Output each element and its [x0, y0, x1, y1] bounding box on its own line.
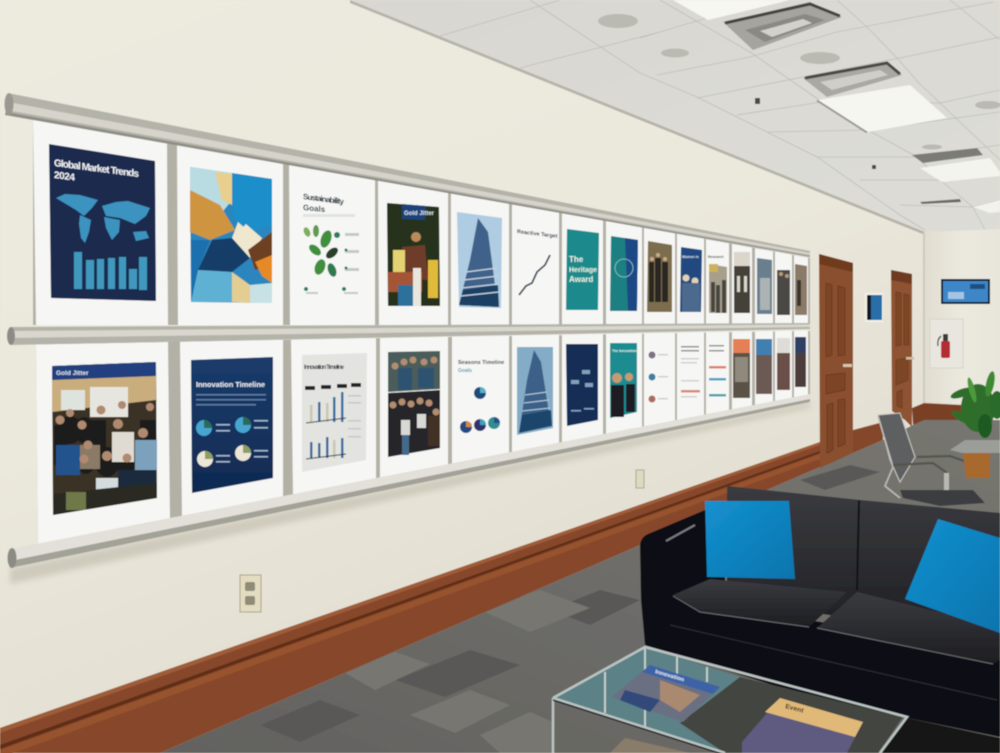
poster: Innovation Timeline navy: [191, 357, 273, 493]
poster: two group photos: [388, 351, 440, 457]
air vent: far: [912, 148, 983, 163]
struts row 1: [33, 116, 810, 325]
side table: [950, 440, 1000, 478]
magazine lower shelf: [610, 738, 690, 753]
magazine left: [612, 665, 720, 722]
air vent: farthest: [920, 199, 961, 204]
poster: navy diagram: [566, 344, 598, 426]
pie charts: [196, 417, 251, 436]
poster: Sustainability Goals: [302, 192, 359, 294]
baseboard: main wall: [0, 442, 820, 753]
floor: [160, 420, 1000, 753]
glass left pane: [553, 647, 740, 753]
sofa front seam: [670, 625, 997, 700]
poster: blue header photo: [756, 339, 772, 394]
frames row 2: [36, 330, 808, 545]
poster: The Heritage Award: [566, 229, 599, 310]
chair arms: [893, 456, 967, 473]
poster: group tan: [647, 241, 672, 312]
ceiling light: top: [673, 0, 790, 20]
poster: navy header photo: [795, 337, 806, 387]
poster title: Innovation Timeline: [196, 380, 265, 389]
rail: middle: [7, 323, 810, 345]
poster: The Heritage Award: The: [569, 255, 584, 264]
world map: [56, 194, 150, 243]
green leaves: [302, 225, 340, 278]
baseboard: between doors: [853, 422, 883, 453]
sofa arm: [640, 510, 725, 645]
poster title: Global Market Trends: [54, 158, 139, 180]
poster: orange header photo: [733, 339, 750, 398]
poster: three circles: [648, 352, 668, 402]
poster: Innovation Timeline bars: [302, 353, 367, 472]
poster title: Sustainability: [303, 192, 345, 206]
poster: Sustainability Goals: Goals: [303, 203, 326, 214]
poster: target line chart: [517, 229, 558, 295]
poster: text with photo: Research: [708, 255, 724, 259]
bar chart: [310, 392, 344, 458]
sofa body: [645, 600, 1000, 737]
air vent: near: [723, 2, 842, 50]
wall TV: [941, 279, 990, 304]
chair frame: [878, 416, 900, 498]
magazine left: Innovation: [655, 669, 685, 684]
baseboard: back corner: [912, 403, 962, 425]
poster: Seasons Timeline pies: [458, 360, 504, 433]
poster: stripes: [709, 345, 726, 396]
bar chart: [74, 252, 147, 290]
sofa back: [727, 486, 1000, 640]
poster: blue group: [680, 247, 702, 312]
round ceiling speakers: [598, 14, 1000, 150]
poster title: Innovation Timeline: [304, 365, 345, 371]
seat cushion right: [817, 592, 1000, 664]
chair back: [878, 413, 915, 482]
magazine right: [742, 698, 863, 753]
poster: tower: [457, 212, 502, 308]
crowd: [54, 416, 156, 477]
chair seat: [900, 490, 985, 506]
coffee table: [553, 647, 907, 753]
poster: Gold Jitter group photo: Gold Jitter: [56, 370, 89, 377]
poster: far end: [795, 264, 807, 315]
dark under sofa: [880, 718, 1000, 753]
poster: narrow group: [777, 270, 790, 315]
struts row 2: [36, 331, 810, 545]
poster: The Heritage Award: Award: [569, 275, 593, 284]
poster: gathering photo: Gold Jitter: [404, 211, 435, 217]
poster: text sheet: [681, 346, 700, 398]
poster: text with photo: [708, 255, 727, 313]
chrome uprights: [605, 647, 707, 727]
rail: top: [4, 93, 810, 257]
blue pillow left: [705, 501, 795, 579]
poster: white header photo: [777, 338, 790, 390]
rail shadow: [10, 402, 810, 584]
blue pillow right: [905, 519, 1000, 633]
poster: teal with people: The Innovation: [612, 349, 637, 353]
poster: tower bottom row: [517, 347, 553, 435]
poster: Global Market Trends: [49, 144, 156, 301]
wall tablet screen: [865, 293, 883, 322]
poster: target line chart: Reactive Target: [517, 229, 558, 240]
poster: blue group: Women in: [682, 255, 699, 259]
fire extinguisher cabinet: [930, 319, 963, 368]
poster: The Heritage Award: Heritage: [569, 267, 597, 274]
frames row 1: [33, 116, 808, 325]
door 1: [819, 254, 853, 468]
chair post: [944, 473, 949, 501]
sofa: [640, 486, 1000, 737]
sprinklers: [755, 98, 876, 169]
light switch: [636, 470, 644, 488]
door 2: [891, 270, 914, 427]
back wall: [924, 229, 1000, 420]
poster: teal with people: [610, 343, 637, 418]
ceiling light: large: [816, 85, 947, 133]
office chair: [878, 413, 985, 506]
rail: bottom: [8, 394, 810, 568]
ceiling light: far: [973, 200, 1000, 213]
poster: Global Market Trends: 2024: [54, 170, 75, 184]
ceiling: [350, 0, 1000, 235]
table dark plate: [680, 677, 903, 753]
magazine right: Event: [785, 703, 805, 715]
pie charts: [474, 387, 486, 399]
poster rail system: [4, 93, 810, 568]
wall outlet: [240, 575, 261, 612]
poster: teal and navy: [610, 236, 638, 311]
air vent: middle: [803, 62, 902, 97]
potted plant: [949, 370, 1000, 438]
poster: dark group: [734, 252, 750, 313]
poster: gathering photo: [387, 203, 440, 306]
poster: grey blue: [757, 258, 772, 314]
poster: abstract art: [190, 167, 272, 303]
black tags: [305, 383, 361, 390]
ceiling light: third: [920, 158, 1000, 182]
chrome frame: [553, 647, 907, 753]
goal list: [306, 233, 359, 294]
seat cushion left: [673, 579, 847, 627]
poster: Seasons Timeline pies: Seasons Timeline: [458, 360, 504, 366]
poster: Seasons Timeline pies: Goals: [458, 368, 472, 374]
poster: Gold Jitter group photo: [52, 362, 157, 515]
